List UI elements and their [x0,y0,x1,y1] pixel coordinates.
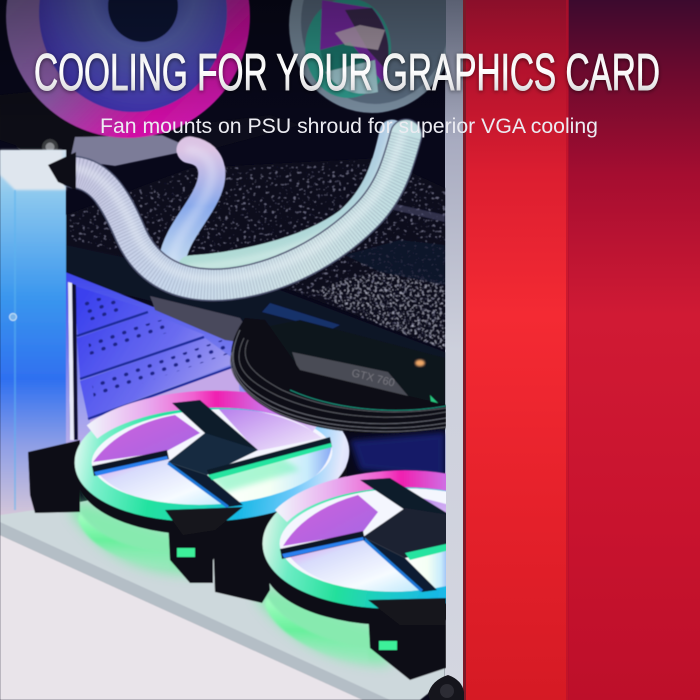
fan 2 frame [267,563,446,680]
braided coolant tube, right branch [190,132,392,268]
card shroud [150,296,445,430]
braided coolant tube, main [74,135,406,285]
fan 2 lower corner bracket [368,598,446,625]
interior dark background [0,0,446,700]
white case floor [0,535,363,700]
thumb screw [428,675,464,700]
white side frame [445,0,466,700]
tube end collar [48,152,76,190]
red exterior panel [465,0,700,700]
subtitle: Fan mounts on PSU shroud for superior VGA cooling [100,115,598,138]
fan 2 light ring [262,469,446,610]
fan 1 light ring [80,394,344,520]
back wall [60,270,250,500]
black power cables [231,318,446,434]
fan 2 hub and struts [280,478,450,592]
green glow under fan 1 [70,500,200,575]
left side panel [0,150,66,520]
tray floor [0,500,445,700]
green glow under fan 2 [256,585,390,665]
tray edge [0,522,390,700]
card bracket bar [66,244,446,358]
top right pump ring [289,0,455,113]
fan 1 hub and struts [92,400,332,507]
black fan mount bracket [14,91,217,167]
graphics card circuit board [60,150,446,355]
fan 1 frame [27,440,347,604]
expansion slot covers [68,282,240,440]
card model text: GTX 760 [350,367,396,390]
shroud accent lights [413,358,439,404]
blue light behind fans [350,432,445,478]
top left fan [6,0,250,138]
fan 1 lower corner bracket [165,507,243,535]
braided coolant tube, left branch [172,150,212,262]
dark top shading [0,0,446,130]
